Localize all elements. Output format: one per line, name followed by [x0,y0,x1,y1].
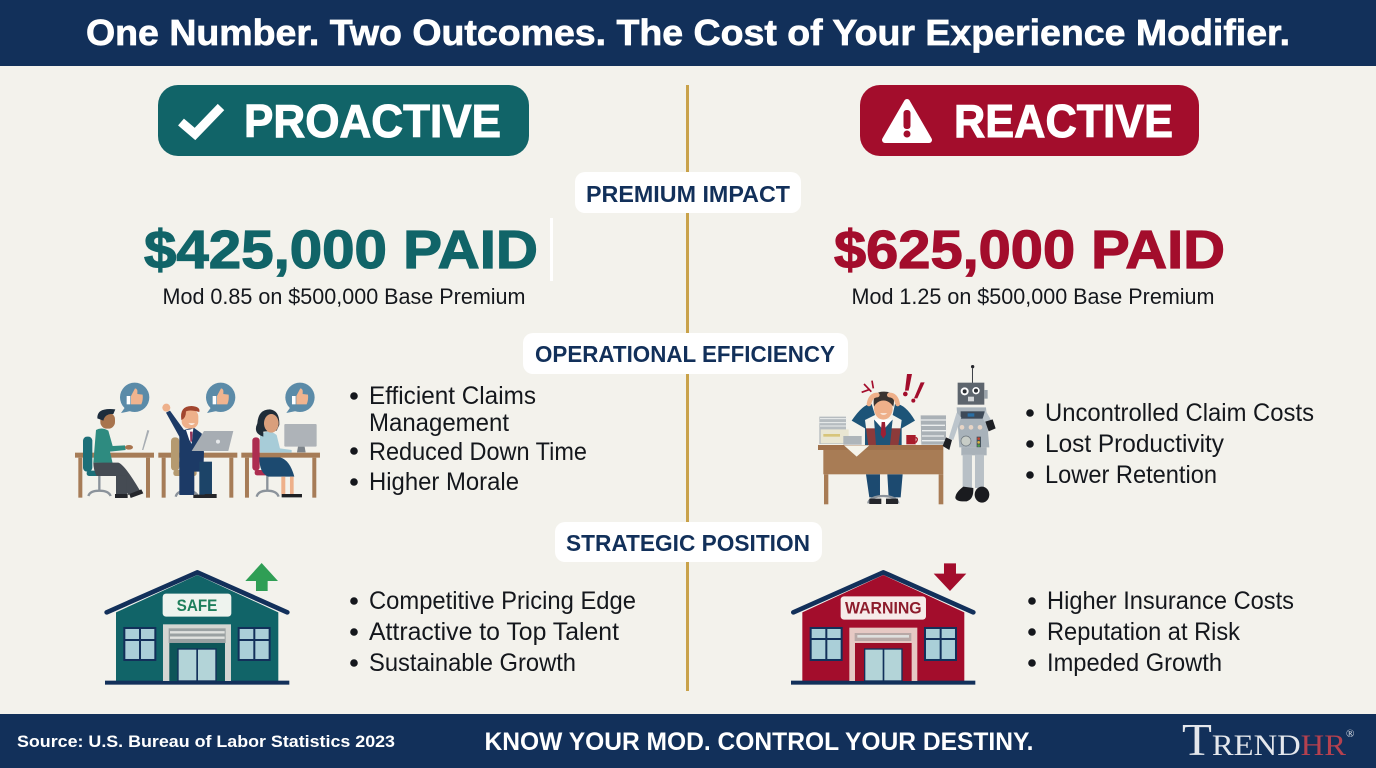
list: reactive strategy: Higher Insurance Costs [1047,587,1294,615]
tagline: KNOW YOUR MOD. CONTROL YOUR DESTINY. [484,728,1034,756]
list: proactive strategy: Sustainable Growth [369,649,576,677]
list: reactive strategy [1028,587,1294,677]
desk [818,435,943,504]
thumbs-up bubbles [120,383,315,413]
heading: operational efficiency: OPERATIONAL EFFICIENCY [535,341,835,367]
icon: safe building [105,563,289,685]
proactive premium figure [144,218,553,309]
list: reactive operations [1026,399,1314,489]
reactive premium figure [834,220,1225,309]
safe sign: SAFE [177,596,217,615]
down arrow [934,563,966,591]
list: proactive operations: Efficient Claims [369,382,536,410]
list: proactive operations [350,382,587,496]
list: reactive operations: Lower Retention [1045,461,1217,489]
worker one [83,409,149,498]
proactive premium figure: Mod 0.85 on $500,000 Base Premium [162,284,526,309]
up arrow [245,563,278,591]
list: reactive operations: Uncontrolled Claim Costs [1045,399,1314,427]
list: proactive strategy: Attractive to Top Talent [369,618,619,646]
heading: strategic position [555,522,822,562]
title banner: One Number. Two Outcomes. The Cost of Your Experience Modifier. [86,12,1290,53]
list: reactive strategy: Reputation at Risk [1047,618,1240,646]
robot [943,365,996,503]
heading: premium impact [575,172,801,213]
icon: happy office workers [75,383,320,498]
safe sign [163,594,231,617]
list: proactive operations: Reduced Down Time [369,438,587,466]
list: proactive strategy: Competitive Pricing Edge [369,587,636,615]
list: reactive operations: Lost Productivity [1045,430,1224,458]
logo: TRENDHR [1182,715,1346,765]
worker two [162,404,233,498]
title banner [0,0,1376,66]
reactive premium figure: $625,000 PAID [834,220,1225,280]
list: proactive operations: Higher Morale [369,468,519,496]
badge: reactive [860,85,1199,156]
footer bar: ® [1346,728,1354,740]
badge: proactive [158,85,529,156]
source note: Source: U.S. Bureau of Labor Statistics 2023 [17,732,395,751]
heading: strategic position: STRATEGIC POSITION [566,530,810,556]
list: proactive operations: Management [369,409,509,437]
icon: stressed manager and robot [818,365,996,504]
warning sign: WARNING [845,599,922,618]
proactive premium figure: $425,000 PAID [144,220,538,280]
heading: operational efficiency [523,333,848,374]
list: reactive strategy: Impeded Growth [1047,649,1222,677]
worker three [252,409,317,497]
heading: premium impact: PREMIUM IMPACT [586,181,790,207]
center divider [686,85,689,691]
badge: reactive: REACTIVE [954,95,1173,147]
badge: proactive: PROACTIVE [244,95,501,147]
list: proactive strategy [350,587,636,677]
paper stacks [819,415,947,445]
desks [75,453,320,498]
footer bar [0,714,1376,768]
manager [852,374,925,446]
icon: warning building [791,563,975,685]
reactive premium figure: Mod 1.25 on $500,000 Base Premium [852,284,1214,309]
